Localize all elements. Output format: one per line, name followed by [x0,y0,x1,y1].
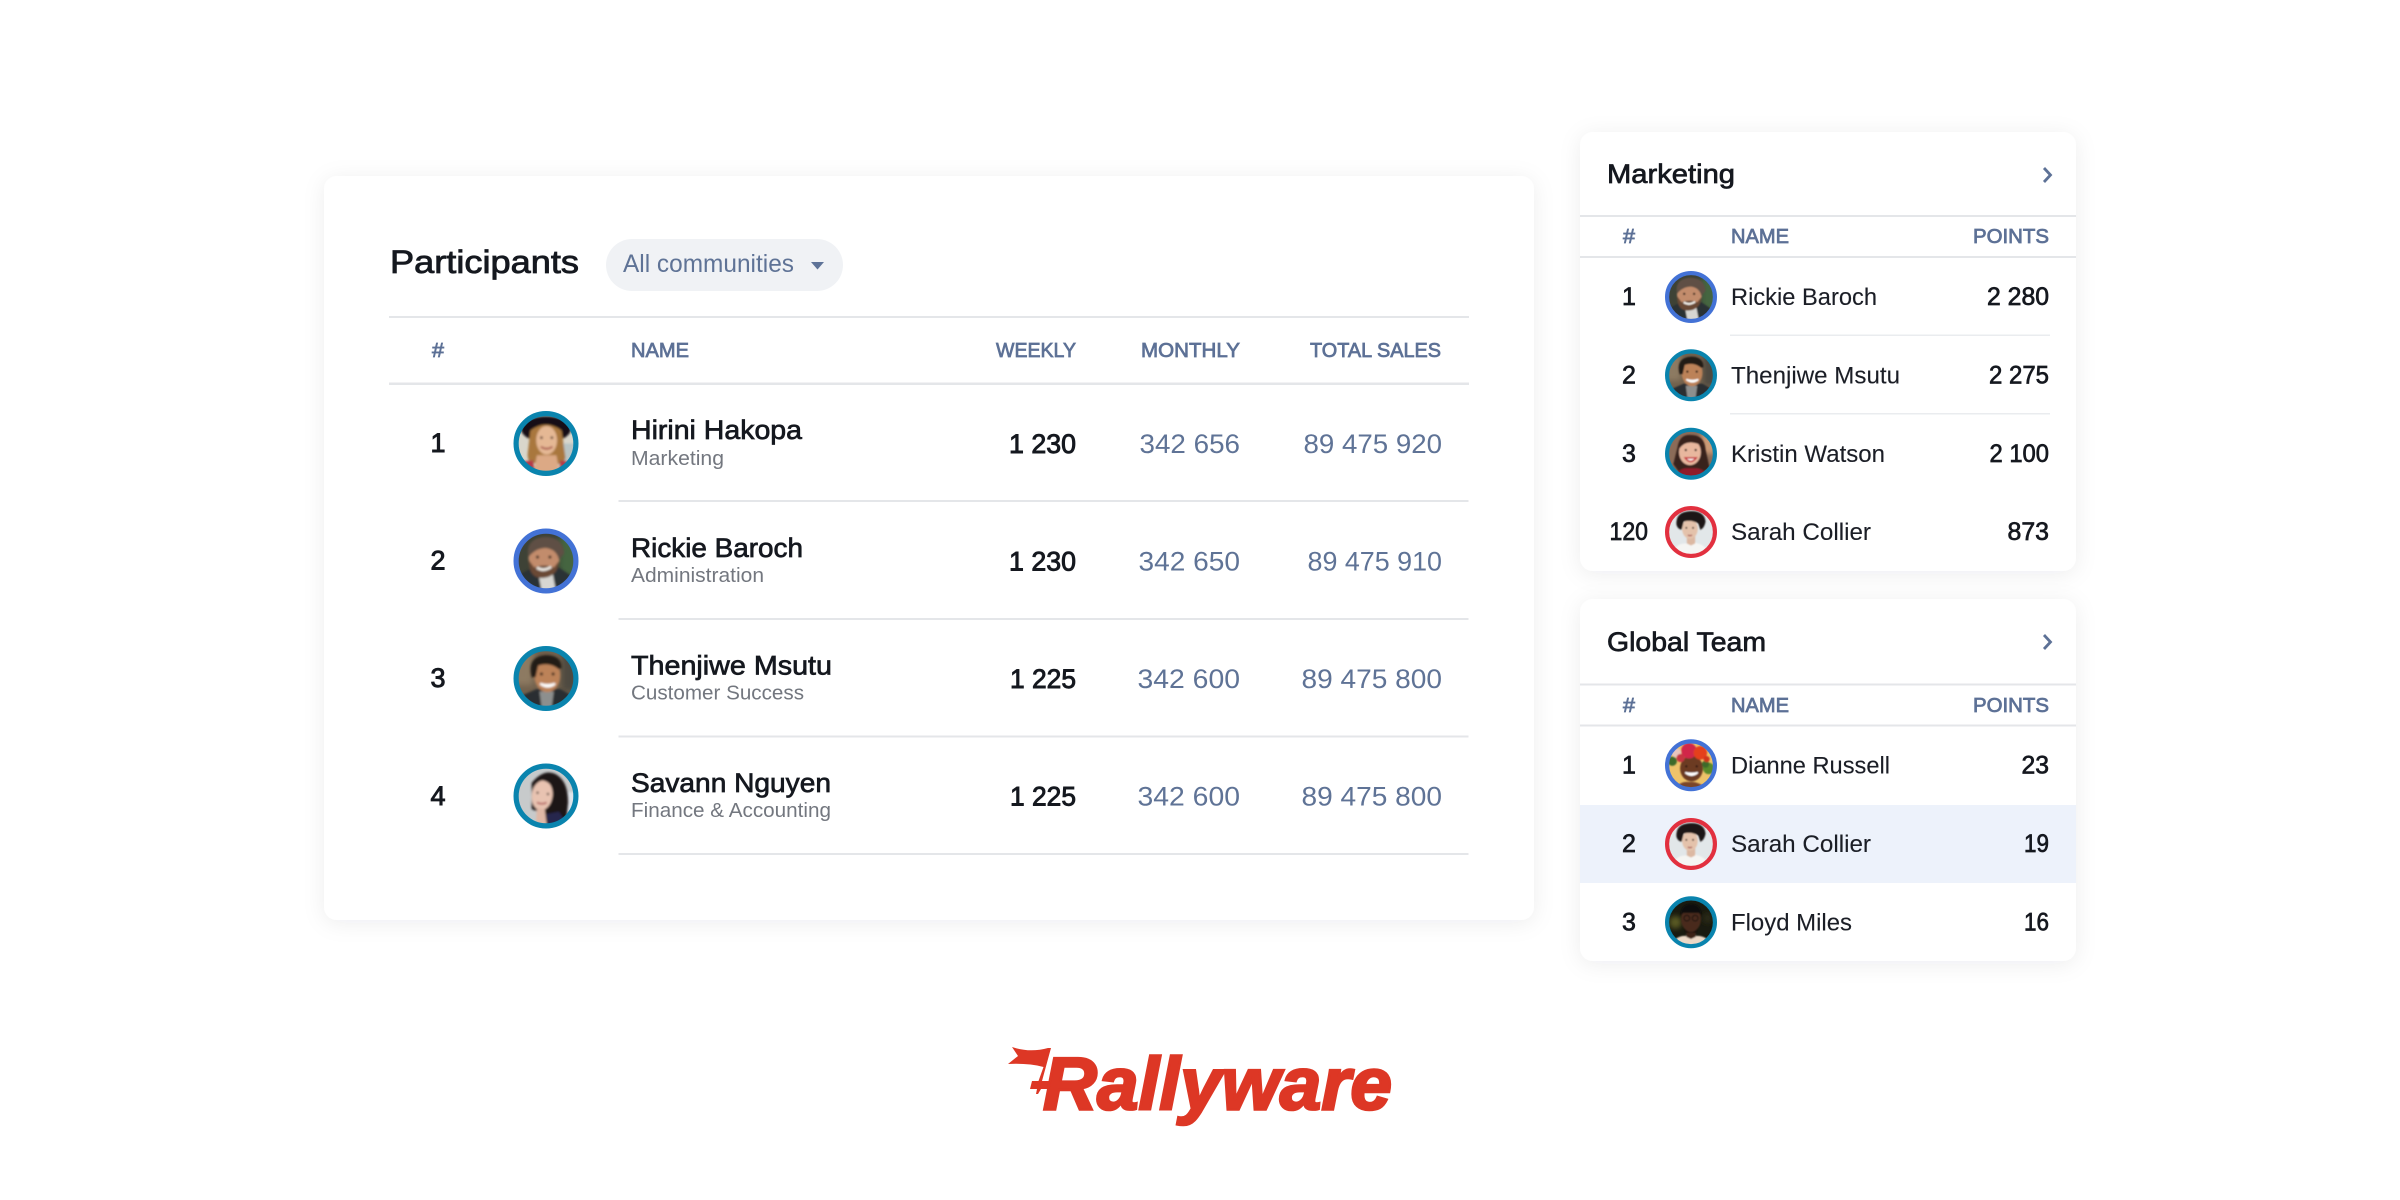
table header row: MONTHLY [1141,340,1240,362]
avatar: Dianne Russell [1665,739,1717,791]
Global Team row 2: Sarah Collier highlighted: 2 [1622,830,1636,858]
row 3: Thenjiwe Msutu: Customer Success [631,682,804,704]
row 2: Rickie Baroch: Rickie Baroch [631,533,803,563]
row 1: Hirini Hakopa: 1 [430,428,446,458]
Marketing row 2: Thenjiwe Msutu: 2 275 [1989,362,2049,390]
row 3: Thenjiwe Msutu [430,646,1468,738]
heading: Marketing: Marketing [1607,159,1735,189]
row 1: Hirini Hakopa: Hirini Hakopa [631,415,803,445]
Global Team row 1: Dianne Russell: Dianne Russell [1731,752,1890,780]
Marketing row 4: Sarah Collier: 120 [1610,518,1648,546]
row 1: Hirini Hakopa: 89 475 920 [1304,429,1442,459]
Global Team row 1: Dianne Russell: 23 [2022,752,2049,780]
row 2: Rickie Baroch: 342 650 [1138,546,1240,576]
row 3: Thenjiwe Msutu: 3 [430,663,446,693]
table header row [389,316,1469,385]
row 4: Savann Nguyen [430,764,1468,855]
Global Team row 2: Sarah Collier highlighted: 19 [2024,830,2049,858]
row 2: Rickie Baroch: 2 [430,546,446,576]
row 3: Thenjiwe Msutu: Thenjiwe Msutu [631,650,832,680]
table header row: WEEKLY [996,340,1076,362]
Global Team header row: # [1623,695,1636,717]
row 3: Thenjiwe Msutu: 1 225 [1010,664,1076,694]
arrow: chevron right [2044,635,2050,649]
Marketing row 3: Kristin Watson [1622,428,2049,480]
avatar: Sarah Collier highlighted row [1665,818,1717,870]
avatar: Thenjiwe Msutu [514,646,578,711]
Marketing row 1: Rickie Baroch: 1 [1622,283,1636,311]
avatar: Sarah Collier small [1665,506,1717,558]
Global Team row 1: Dianne Russell: 1 [1622,752,1636,780]
logo: Rallyware: Rallyware [1043,1042,1392,1126]
Global Team row 2: Sarah Collier highlighted: Sarah Collier [1731,831,1871,858]
panel: Marketing leaderboard [1580,132,2076,571]
Global Team row 3: Floyd Miles: 3 [1622,908,1636,936]
avatar: Hirini Hakopa [514,411,578,476]
row 3: Thenjiwe Msutu: 89 475 800 [1302,664,1442,694]
Global Team header row [1580,684,2076,726]
Marketing row 4: Sarah Collier [1610,506,2049,558]
Global Team row 1: Dianne Russell [1622,739,2049,791]
table header row: NAME [631,340,689,362]
filter dropdown: All communities [606,239,843,291]
Marketing row 2: Thenjiwe Msutu [1622,349,2050,414]
Marketing row 4: Sarah Collier: Sarah Collier [1731,519,1871,546]
leaderboard infographic canvas [323,157,2077,1126]
row 4: Savann Nguyen: 342 600 [1138,782,1240,812]
avatar: Floyd Miles [1665,896,1717,948]
row 3: Thenjiwe Msutu: 342 600 [1138,664,1240,694]
row 1: Hirini Hakopa: Marketing [631,447,724,470]
avatar: Rickie Baroch [514,528,578,594]
row 2: Rickie Baroch [430,528,1468,620]
Marketing header row: POINTS [1973,226,2049,248]
row 4: Savann Nguyen: Finance & Accounting [631,799,831,822]
row 2: Rickie Baroch: 1 230 [1009,546,1076,576]
Global Team row 2: Sarah Collier highlighted [1580,805,2076,883]
row 1: Hirini Hakopa: 342 656 [1140,429,1240,459]
Marketing row 2: Thenjiwe Msutu: Thenjiwe Msutu [1731,362,1900,390]
Marketing row 1: Rickie Baroch [1622,271,2050,336]
row 4: Savann Nguyen: Savann Nguyen [631,768,831,798]
Marketing row 1: Rickie Baroch: Rickie Baroch [1731,284,1877,311]
Marketing header row [1580,215,2076,258]
Marketing row 3: Kristin Watson: Kristin Watson [1731,441,1885,468]
avatar: Kristin Watson [1665,428,1717,480]
Global Team header row: NAME [1731,695,1789,717]
filter dropdown: All communities: All communities [623,250,794,278]
icon: flag with pole and cross [1008,1047,1066,1094]
Global Team row 3: Floyd Miles [1622,896,2049,948]
Marketing row 1: Rickie Baroch: 2 280 [1987,283,2049,311]
table header row: TOTAL SALES [1310,340,1441,362]
Global Team header row: POINTS [1973,695,2049,717]
heading: Global Team: Global Team [1607,627,1766,657]
Marketing row 3: Kristin Watson: 2 100 [1990,440,2049,468]
row 1: Hirini Hakopa: 1 230 [1009,429,1076,459]
panel: participants table [324,176,1534,920]
heading: Participants: Participants [390,244,579,280]
row 2: Rickie Baroch: Administration [631,564,764,587]
table header row: # [432,340,445,362]
row 4: Savann Nguyen: 4 [430,781,446,811]
avatar: Rickie Baroch small [1665,271,1717,323]
avatar: Thenjiwe Msutu small [1665,349,1717,401]
row 1: Hirini Hakopa [430,411,1468,502]
Marketing row 2: Thenjiwe Msutu: 2 [1622,362,1636,390]
avatar: Savann Nguyen [514,764,578,828]
row 2: Rickie Baroch: 89 475 910 [1308,546,1442,576]
Marketing header row: # [1623,226,1636,248]
panel: Global Team leaderboard [1580,599,2076,961]
arrow: chevron right [2044,168,2050,182]
Global Team row 3: Floyd Miles: 16 [2024,908,2049,936]
Global Team row 3: Floyd Miles: Floyd Miles [1731,910,1852,936]
Marketing header row: NAME [1731,226,1789,248]
row 4: Savann Nguyen: 89 475 800 [1302,782,1442,812]
Marketing row 4: Sarah Collier: 873 [2008,518,2049,546]
Marketing row 3: Kristin Watson: 3 [1622,440,1636,468]
row 4: Savann Nguyen: 1 225 [1010,782,1076,812]
